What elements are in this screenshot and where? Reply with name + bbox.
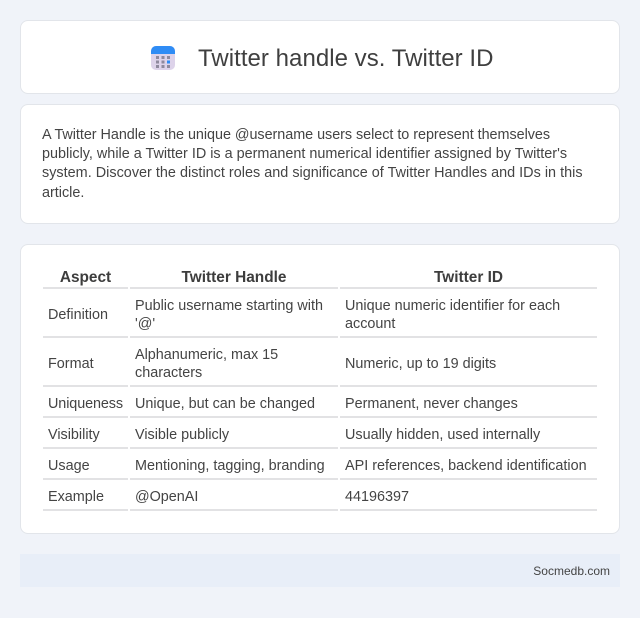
- row: example: @OpenAI: [135, 489, 198, 505]
- text block: introduction: publicly, while a Twitter ID is a permanent numerical identifier assigned by Twitter's: [42, 146, 567, 162]
- row: format: Format: [48, 356, 94, 372]
- text block: introduction: article.: [42, 185, 84, 201]
- row: definition: Unique numeric identifier for each: [345, 298, 560, 314]
- row: uniqueness: Unique, but can be changed: [135, 396, 315, 412]
- text block: introduction: system. Discover the distinct roles and significance of Twitter Handles and IDs in this: [42, 165, 583, 181]
- row: definition: [48, 298, 560, 332]
- panel: introduction: [20, 104, 620, 224]
- text block: introduction: A Twitter Handle is the unique @username users select to represent themselves: [42, 127, 550, 143]
- row: definition: account: [345, 316, 395, 332]
- text block: introduction: [42, 127, 583, 201]
- row: uniqueness: [48, 396, 518, 412]
- row: visibility: Usually hidden, used internally: [345, 427, 540, 443]
- title: Twitter handle vs. Twitter ID: [198, 45, 494, 72]
- row: format: [48, 347, 496, 381]
- panel: comparison table: [20, 244, 620, 534]
- icon: calendar: [151, 46, 175, 70]
- panel: title card: [20, 20, 620, 94]
- table header: Twitter Handle: [182, 269, 286, 286]
- footer text: Socmedb.com: [533, 564, 610, 578]
- row: definition: '@': [135, 316, 155, 332]
- row: visibility: [48, 427, 540, 443]
- row: example: Example: [48, 489, 104, 505]
- row: format: Numeric, up to 19 digits: [345, 356, 496, 372]
- row: usage: Mentioning, tagging, branding: [135, 458, 325, 474]
- row: usage: [48, 458, 587, 474]
- row: usage: Usage: [48, 458, 90, 474]
- row: format: Alphanumeric, max 15: [135, 347, 278, 363]
- row: visibility: Visibility: [48, 427, 100, 443]
- table header: Twitter ID: [434, 269, 503, 286]
- row: uniqueness: Permanent, never changes: [345, 396, 518, 412]
- row: format: characters: [135, 365, 202, 381]
- row: uniqueness: Uniqueness: [48, 396, 123, 412]
- row: definition: Definition: [48, 307, 108, 323]
- row: example: 44196397: [345, 489, 409, 505]
- row: usage: API references, backend identification: [345, 458, 587, 474]
- row: definition: Public username starting with: [135, 298, 323, 314]
- row: example: [48, 489, 409, 505]
- table header: [60, 269, 503, 286]
- row: visibility: Visible publicly: [135, 427, 229, 443]
- footer bar: [20, 554, 620, 587]
- table header: Aspect: [60, 269, 111, 286]
